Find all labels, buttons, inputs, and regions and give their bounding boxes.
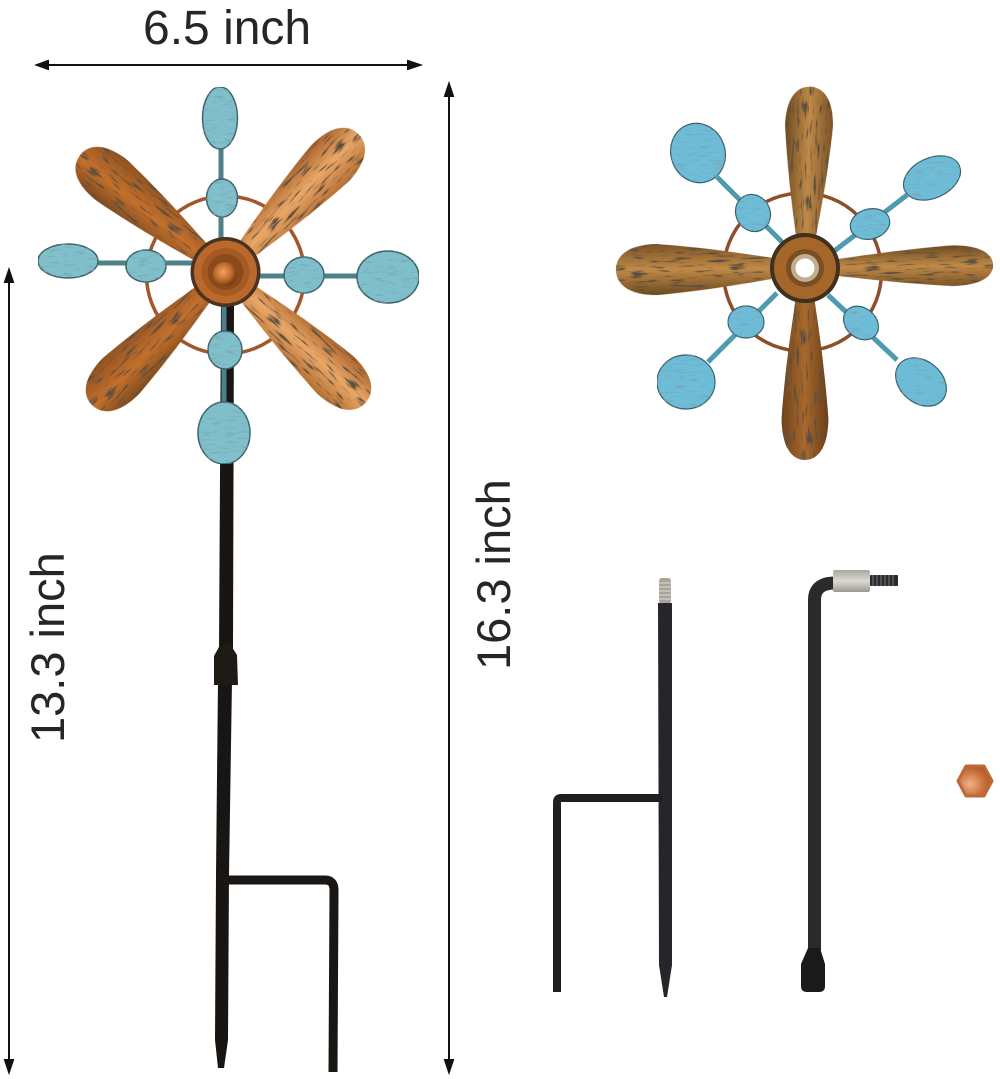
blue paddle arms	[98, 145, 358, 405]
overall height arrow	[445, 84, 453, 1072]
width dimension: 6.5 inch	[37, 2, 420, 69]
assembled spinner on stake	[38, 87, 419, 1072]
socket end	[801, 948, 825, 992]
width label: 6.5 inch	[143, 2, 311, 55]
silver coupling nut	[833, 570, 870, 592]
stake sleeve	[214, 644, 238, 685]
threaded tip	[659, 578, 671, 604]
copper blade: lower left	[74, 273, 224, 423]
blue paddles	[38, 87, 419, 464]
loose part: L-shaped rod	[801, 570, 898, 992]
width arrow	[37, 61, 420, 69]
overall height label: 16.3 inch	[467, 479, 520, 670]
blue paddle arms	[708, 177, 907, 362]
copper blade: upper right	[226, 116, 377, 270]
ring	[724, 193, 882, 351]
rear hub with bearing	[770, 233, 840, 303]
stake height dimension: 13.3 inch	[5, 270, 74, 1072]
front hub	[190, 237, 260, 307]
blue paddles	[657, 116, 968, 416]
wood-tone blade: left	[616, 243, 778, 295]
copper blade: upper left	[64, 135, 220, 275]
loose part: copper cap nut	[958, 766, 992, 796]
stake height label: 13.3 inch	[21, 552, 74, 743]
wood-tone blade: top	[782, 86, 834, 242]
wood-tone blade: right	[832, 245, 993, 288]
ring	[146, 196, 304, 354]
copper blade: lower right	[228, 272, 383, 422]
threaded bolt	[870, 575, 898, 586]
rear view spinner	[616, 86, 993, 460]
side fork	[557, 798, 662, 992]
height dimension: 16.3 inch	[445, 84, 520, 1072]
rod	[658, 603, 672, 997]
stake height arrow	[5, 270, 13, 1072]
stake pole	[215, 300, 234, 1068]
wood-tone blade: bottom	[782, 296, 828, 460]
loose part: forked stake	[557, 578, 672, 997]
rod	[814, 583, 835, 950]
stake fork	[224, 880, 334, 1072]
